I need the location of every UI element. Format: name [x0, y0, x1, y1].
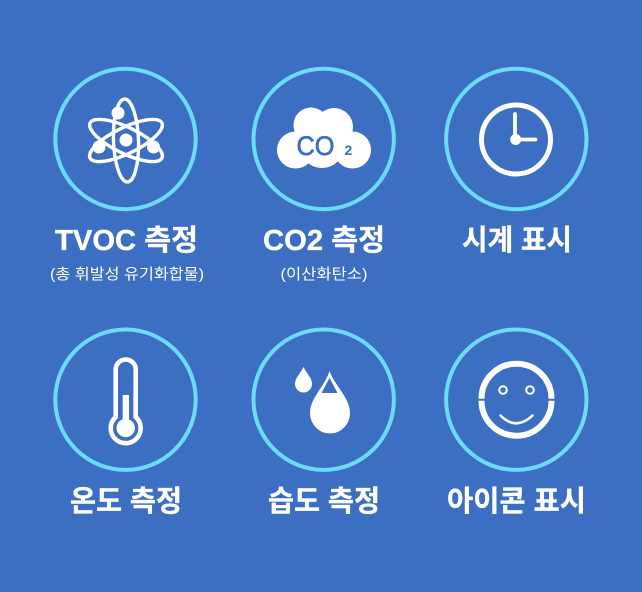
item: humidity measurement: [254, 330, 394, 518]
item: icon display: [446, 330, 586, 518]
icon ring: CO2: [254, 69, 394, 209]
icon: atom: [84, 99, 168, 182]
icon ring: clock: [446, 69, 586, 209]
icon: thermometer: [111, 360, 141, 443]
heading: humidity: 습도 측정: [268, 485, 380, 518]
icon: smiley face: [482, 364, 552, 436]
heading: temperature: 온도 측정: [70, 485, 182, 518]
heading: CO2: CO2 측정: [263, 224, 385, 257]
icon: CO2 cloud: [277, 108, 371, 168]
icon ring: temperature: [55, 330, 196, 470]
icon: CO2 cloud: 2: [344, 142, 352, 158]
subtext: CO2: (이산화탄소): [280, 266, 368, 283]
heading: icon display: 아이콘 표시: [447, 485, 586, 518]
icon ring: smiley: [446, 330, 586, 470]
icon: CO2 cloud: CO: [296, 131, 334, 161]
item: CO2 measurement: [254, 69, 394, 283]
icon ring: TVOC: [55, 69, 196, 209]
subtext: TVOC: (총 휘발성 유기화합물): [50, 266, 204, 283]
icon: clock: [482, 105, 550, 174]
icon ring: humidity: [254, 330, 394, 470]
heading: TVOC: TVOC 측정: [55, 224, 198, 257]
item: temperature measurement: [55, 330, 196, 518]
item: TVOC measurement: [50, 69, 204, 283]
heading: clock: 시계 표시: [462, 224, 572, 257]
item: clock display: [446, 69, 586, 257]
icon: water drops: [295, 367, 350, 434]
